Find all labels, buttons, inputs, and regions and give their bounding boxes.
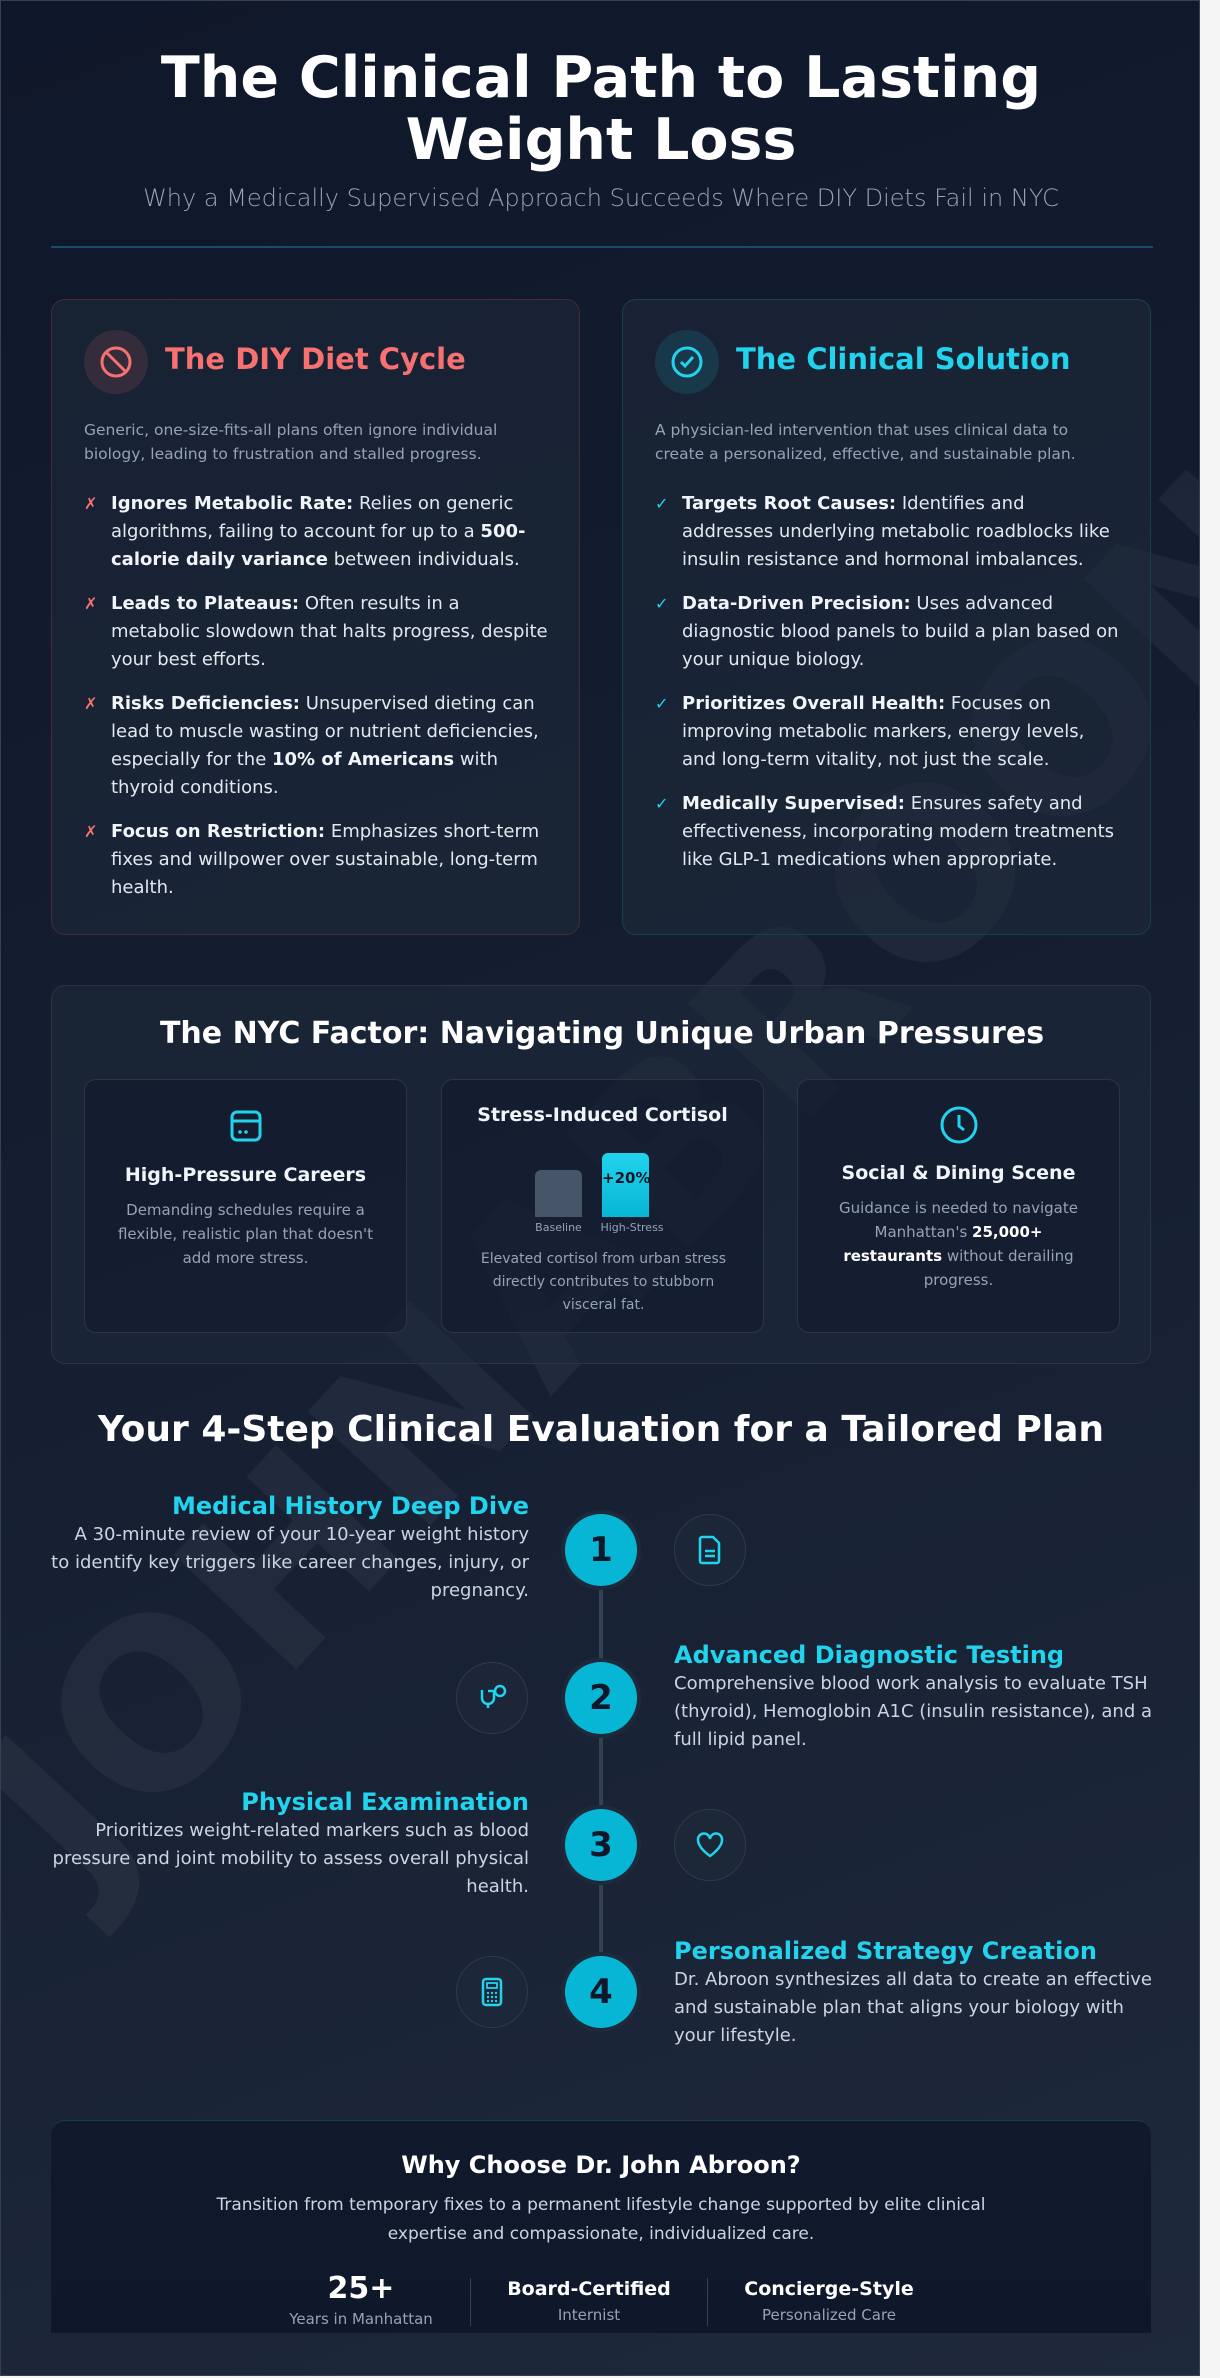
stats: Years in Manhattan bbox=[289, 2310, 433, 2328]
title bbox=[161, 45, 1041, 173]
card: dining: Social & Dining Scene bbox=[842, 1162, 1075, 1184]
stats: Internist bbox=[558, 2306, 620, 2324]
list of clinical benefits: Prioritizes Overall Health: Focuses on improving metabolic markers, energy levels, and long-term vitality, not just the scale. bbox=[682, 693, 1084, 770]
list of DIY problems: ✗ bbox=[84, 494, 97, 513]
step 2 number bbox=[565, 1662, 637, 1734]
list of DIY problems: ✗ bbox=[84, 594, 97, 613]
icon: clock bbox=[940, 1106, 978, 1144]
step 4 number bbox=[565, 1956, 637, 2028]
icon: heart bbox=[674, 1809, 746, 1881]
list of clinical benefits: addresses underlying metabolic roadblocks like insulin resistance and hormonal imbalances. bbox=[682, 521, 1110, 570]
step 1 number: 1 bbox=[589, 1530, 613, 1570]
step 2: Comprehensive blood work analysis to evaluate TSH (thyroid), Hemoglobin A1C (insulin resistance), and a full lipid panel. bbox=[674, 1673, 1152, 1750]
list of DIY problems: Ignores Metabolic Rate: Relies on generic algorithms, failing to account for up to a 500-calorie daily variance between individuals. bbox=[111, 493, 525, 570]
list of DIY problems: Risks Deficiencies: Unsupervised dieting can lead to muscle wasting or nutrient deficiencies, especially for the 10% of Americans with thyroid conditions. bbox=[111, 693, 539, 798]
bar chart: High-Stress bbox=[600, 1221, 664, 1234]
step 1: Medical History Deep Dive bbox=[172, 1492, 529, 1520]
list of clinical benefits: ✓ bbox=[655, 794, 668, 813]
card: cortisol chart: Elevated cortisol from urban stress directly contributes to stubborn visceral fat. bbox=[481, 1251, 726, 1313]
step 4: Dr. Abroon synthesizes all data to create an effective and sustainable plan that aligns your biology with your lifestyle. bbox=[674, 1969, 1152, 2046]
heading: The Clinical Solution bbox=[736, 342, 1071, 376]
icon: calculator bbox=[456, 1956, 528, 2028]
description: Generic, one-size-fits-all plans often ignore individual biology, leading to frustration and stalled progress. bbox=[84, 421, 497, 463]
list of clinical benefits: ✓ bbox=[655, 694, 668, 713]
list of DIY problems: Focus on Restriction: Emphasizes short-term fixes and willpower over sustainable, long-term health. bbox=[111, 821, 539, 898]
icon: document bbox=[674, 1514, 746, 1586]
list of DIY problems: Leads to Plateaus: Often results in a metabolic slowdown that halts progress, despite your best efforts. bbox=[111, 593, 548, 670]
heading: 4-step evaluation: Your 4-Step Clinical Evaluation for a Tailored Plan bbox=[98, 1409, 1104, 1450]
icon: prohibited bbox=[84, 330, 148, 394]
list of DIY problems: ✗ bbox=[84, 822, 97, 841]
title: Weight Loss bbox=[406, 107, 796, 173]
bar chart: Baseline bbox=[535, 1221, 582, 1234]
step 1: A 30-minute review of your 10-year weight history bbox=[75, 1524, 529, 1545]
card: cortisol chart: Stress-Induced Cortisol bbox=[477, 1104, 728, 1126]
bar chart bbox=[535, 1153, 664, 1234]
panel: NYC factor bbox=[51, 985, 1151, 1364]
stats: Concierge-Style bbox=[744, 2278, 914, 2300]
step 3 number: 3 bbox=[589, 1825, 613, 1865]
card: cortisol chart bbox=[441, 1079, 764, 1333]
panel: DIY diet cycle bbox=[51, 299, 580, 935]
list of clinical benefits bbox=[655, 493, 1119, 870]
step 3: Prioritizes weight-related markers such as blood pressure and joint mobility to assess overall physical health. bbox=[53, 1820, 529, 1897]
step 1 number bbox=[565, 1514, 637, 1586]
panel: why choose bbox=[51, 2120, 1151, 2333]
step 1 bbox=[51, 1492, 529, 1601]
step 4 number: 4 bbox=[589, 1972, 613, 2012]
heading: Why Choose Dr. John Abroon? bbox=[401, 2151, 801, 2179]
title: The Clinical Path to Lasting bbox=[161, 45, 1041, 111]
step 2: Advanced Diagnostic Testing bbox=[674, 1641, 1064, 1669]
heading: The NYC Factor: Navigating Unique Urban Pressures bbox=[160, 1016, 1044, 1051]
stats: Board-Certified bbox=[507, 2278, 671, 2300]
stats: Personalized Care bbox=[762, 2306, 896, 2324]
list of clinical benefits: Targets Root Causes: Identifies and bbox=[682, 493, 1025, 514]
card: careers: High-Pressure Careers bbox=[125, 1164, 366, 1186]
heading: The DIY Diet Cycle bbox=[165, 342, 466, 376]
list of clinical benefits: ✓ bbox=[655, 594, 668, 613]
icon: stethoscope bbox=[456, 1662, 528, 1734]
stats: 25+ bbox=[328, 2271, 394, 2306]
bar chart: +20% bbox=[602, 1169, 650, 1187]
step 2 number: 2 bbox=[589, 1678, 613, 1718]
list of clinical benefits: Data-Driven Precision: Uses advanced diagnostic blood panels to build a plan based on your unique biology. bbox=[682, 593, 1119, 670]
panel: clinical solution bbox=[622, 299, 1151, 935]
timeline line bbox=[599, 1551, 603, 1996]
step 4: Personalized Strategy Creation bbox=[674, 1937, 1097, 1965]
icon: check circle bbox=[655, 330, 719, 394]
list of clinical benefits: Medically Supervised: Ensures safety and effectiveness, incorporating modern treatments like GLP-1 medications when appropriate. bbox=[682, 793, 1114, 870]
card: careers bbox=[84, 1079, 407, 1333]
card: dining bbox=[797, 1079, 1120, 1333]
step 1: to identify key triggers like career changes, injury, or pregnancy. bbox=[51, 1552, 529, 1601]
icon: card bbox=[230, 1110, 262, 1142]
step 3: Physical Examination bbox=[241, 1788, 529, 1816]
card: dining: Guidance is needed to navigate Manhattan's 25,000+ restaurants without derailing progress. bbox=[839, 1199, 1078, 1289]
list of DIY problems bbox=[84, 493, 548, 898]
subtitle: Why a Medically Supervised Approach Succeeds Where DIY Diets Fail in NYC bbox=[143, 184, 1059, 212]
list of DIY problems: ✗ bbox=[84, 694, 97, 713]
stats bbox=[289, 2271, 914, 2328]
card: careers: Demanding schedules require a flexible, realistic plan that doesn't add more stress. bbox=[118, 1201, 373, 1267]
description: A physician-led intervention that uses clinical data to create a personalized, effective, and sustainable plan. bbox=[655, 421, 1076, 463]
step 3 number bbox=[565, 1809, 637, 1881]
list of clinical benefits: ✓ bbox=[655, 494, 668, 513]
text: Transition from temporary fixes to a permanent lifestyle change supported by elite clinical expertise and compassionate, individualized care. bbox=[216, 2195, 985, 2244]
